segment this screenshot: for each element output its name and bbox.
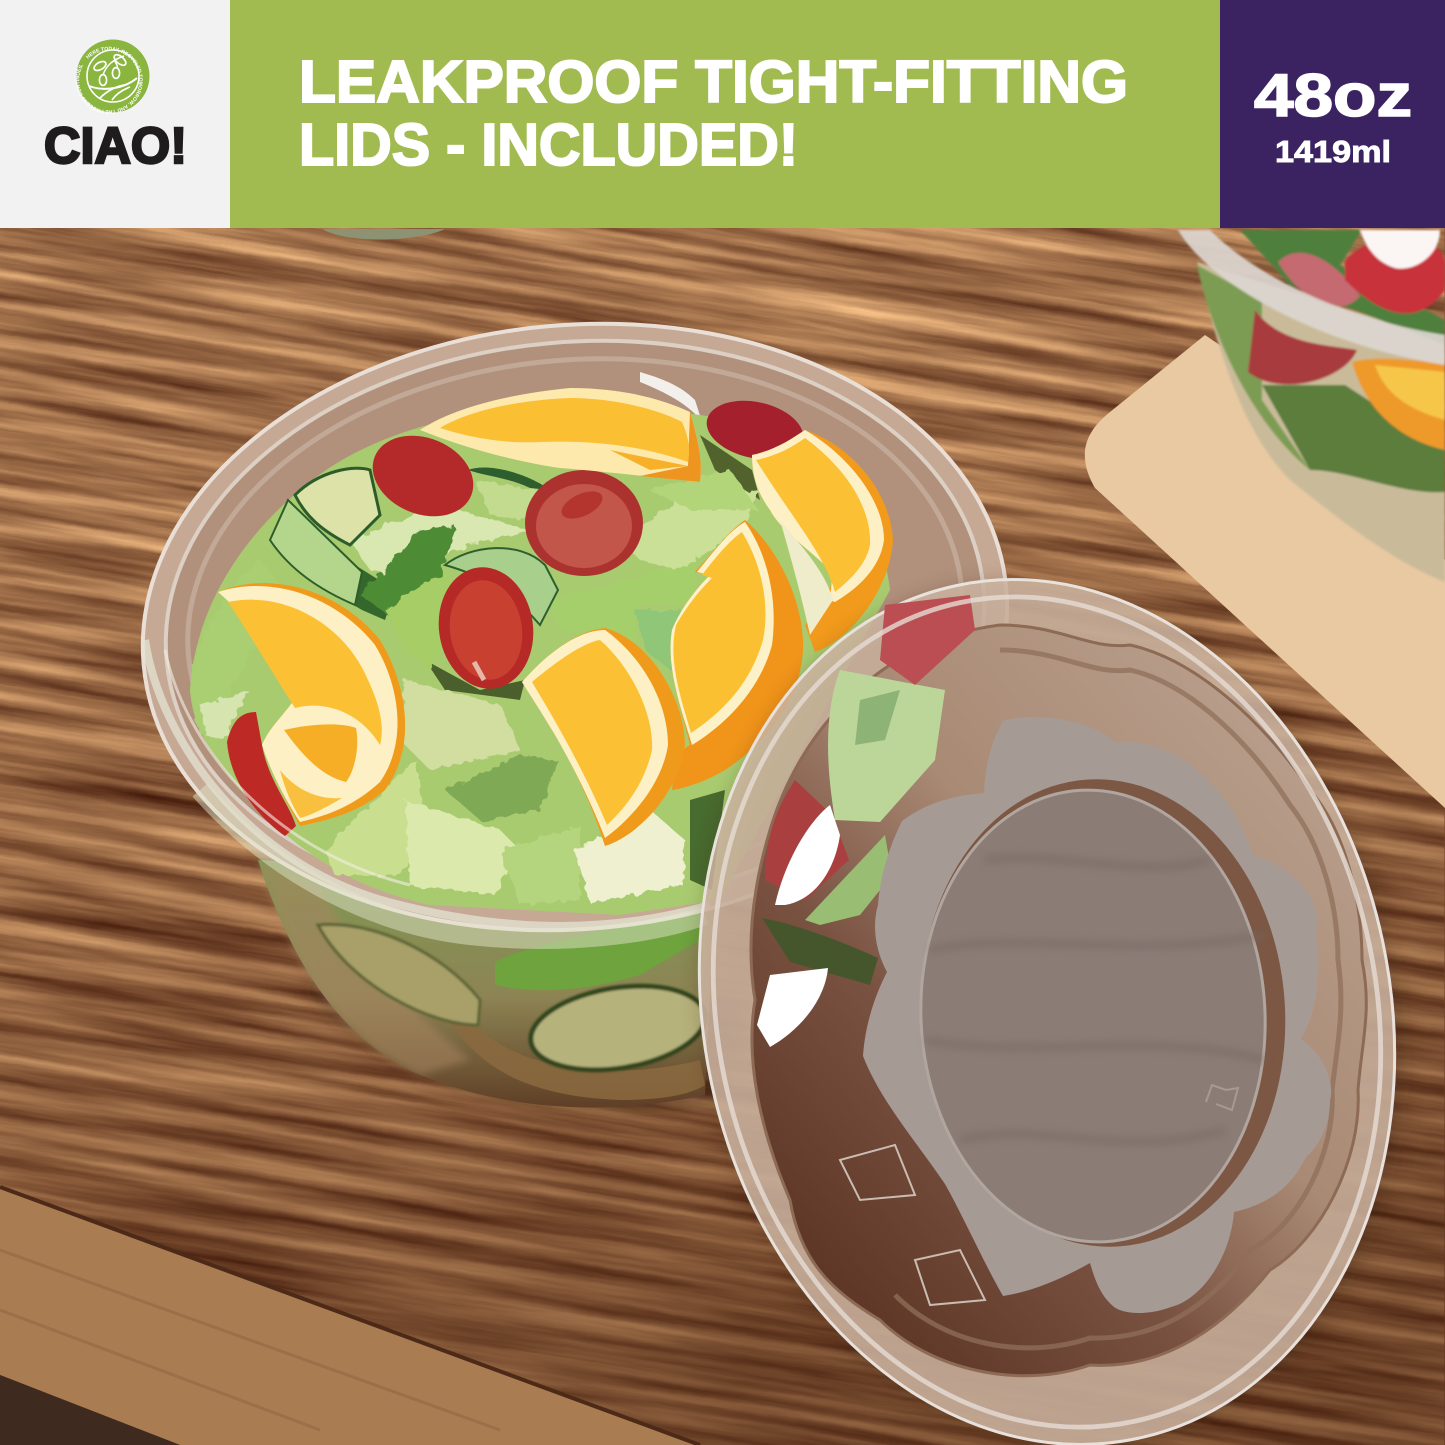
orange slice: right	[752, 430, 893, 652]
bowl front rim highlight	[145, 640, 710, 926]
lid flat disc centre	[909, 781, 1277, 1251]
cucumber through bowl right	[525, 975, 711, 1081]
lid base	[699, 580, 1395, 1444]
tomato: halved, top centre	[525, 470, 643, 576]
second bowl tomato	[1248, 310, 1357, 385]
tomato: left sliver	[227, 712, 296, 836]
lid flower panel	[863, 717, 1331, 1313]
header: purple size panel	[1220, 0, 1445, 228]
orange slice: left	[218, 583, 405, 826]
lid outer rim highlight	[713, 597, 1381, 1427]
green lettuce through bowl	[495, 905, 700, 990]
cutting board, top right	[1085, 335, 1445, 808]
bowl rim	[117, 288, 1033, 966]
tomato: whole, upper right	[701, 392, 809, 468]
lettuce leaves	[190, 470, 760, 905]
reflection highlight, upper	[775, 805, 840, 905]
reflection highlight, lower	[757, 968, 828, 1047]
second bowl body	[1197, 262, 1445, 582]
lid shadow	[703, 584, 1402, 1445]
bowl lower body	[258, 860, 715, 1107]
lettuce behind right orange	[780, 520, 833, 635]
disc grain	[925, 858, 1265, 1142]
orange slice: centre	[522, 628, 685, 846]
size in millilitres: 1419ml	[1275, 134, 1391, 169]
second bowl lettuce, left wall	[1197, 265, 1310, 470]
tomato: whole, upper left	[361, 421, 485, 531]
header: logo panel	[0, 0, 230, 228]
bowl highlight, top	[640, 372, 702, 422]
recycling mark	[1206, 1085, 1238, 1110]
shadow gaps between leaves	[345, 435, 760, 890]
second bowl orange flesh	[1375, 365, 1445, 420]
second bowl rim	[1178, 230, 1445, 365]
lid, rotated on table	[699, 580, 1402, 1445]
second bowl greens at top	[1240, 230, 1445, 345]
title	[299, 49, 1128, 178]
wood seen through bowl, left	[258, 860, 470, 1075]
lid flat disc ring	[905, 767, 1301, 1259]
title: LEAKPROOF TIGHT-FITTING	[299, 49, 1128, 115]
bowl with salad	[117, 288, 1033, 1108]
second bowl dark lettuce, lower	[1262, 385, 1445, 492]
tomato: halved, centre	[431, 561, 541, 695]
header: green title banner	[230, 0, 1220, 228]
light wooden plank, bottom left	[0, 1187, 700, 1445]
second bowl highlight	[1360, 230, 1440, 269]
logo wordmark: CIAO!	[44, 117, 187, 174]
salad base	[190, 406, 890, 915]
bowl wood reflection	[440, 1010, 705, 1100]
second bowl pink tomato	[1278, 253, 1360, 306]
lid embossed diamonds	[840, 1145, 985, 1305]
logo badge: HERE TODAY, RECYCLED TOMORROW. AND THE PROCESS CONTINUES.	[76, 46, 143, 114]
scalloped ring inside well	[895, 650, 1341, 1348]
blurred second bowl, top right	[1178, 230, 1445, 582]
size in ounces: 48oz	[1254, 62, 1412, 129]
title: LIDS - INCLUDED!	[299, 112, 798, 178]
second bowl tomato top	[1345, 238, 1445, 313]
salad seen through lid	[762, 595, 975, 985]
cucumber slices	[270, 468, 558, 625]
orange slice: centre right	[671, 520, 803, 790]
blurred bottle at the top edge	[322, 229, 445, 240]
lid inner well	[751, 625, 1366, 1376]
cucumber through bowl left	[318, 924, 480, 1025]
orange slice: top	[420, 388, 701, 482]
second bowl orange	[1352, 359, 1445, 450]
bowl shadow	[300, 980, 740, 1108]
